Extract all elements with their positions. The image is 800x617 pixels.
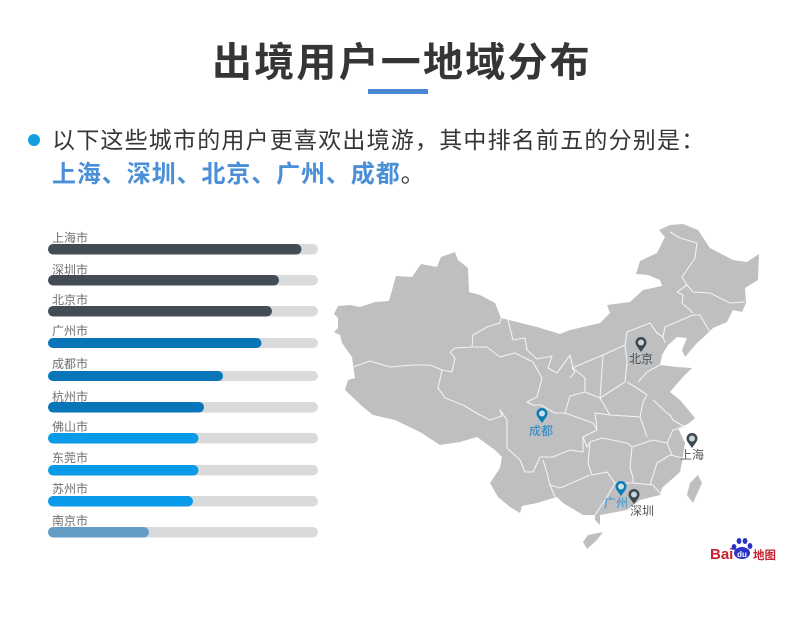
bar: 苏州市: 苏州市	[52, 481, 88, 496]
bar: 广州市	[48, 323, 318, 348]
mainland	[334, 224, 759, 525]
Baidu map logo: 地图	[753, 548, 776, 562]
bullet dot	[28, 134, 40, 146]
bar: 广州市: 广州市	[52, 323, 88, 338]
marker: 成都: 成都	[529, 424, 553, 438]
marker: 上海: 上海	[680, 447, 704, 462]
bar: 杭州市	[48, 389, 318, 412]
bar: 北京市	[48, 292, 318, 316]
Taiwan	[687, 475, 702, 503]
bar: 南京市: 南京市	[52, 513, 88, 528]
bar: 成都市: 成都市	[52, 356, 88, 371]
bullet text block	[28, 127, 705, 188]
marker: 上海	[680, 433, 704, 462]
marker: 广州	[604, 481, 628, 510]
bar: 深圳市	[48, 262, 318, 286]
bar: 上海市	[48, 230, 318, 254]
marker: 深圳	[628, 489, 654, 518]
bar: 杭州市: 杭州市	[52, 389, 88, 404]
bar: 佛山市	[48, 419, 318, 444]
bar: 深圳市: 深圳市	[52, 262, 88, 277]
marker: 深圳: 深圳	[630, 504, 654, 518]
province borders	[353, 232, 745, 515]
marker: 成都	[529, 408, 553, 438]
map of China	[334, 224, 759, 549]
bar chart: cities	[48, 230, 318, 538]
marker: 北京	[629, 337, 653, 366]
bar: 北京市: 北京市	[52, 292, 88, 307]
Baidu map logo: du	[737, 550, 747, 559]
bar: 成都市	[48, 356, 318, 381]
title underline	[368, 89, 428, 94]
bar: 佛山市: 佛山市	[52, 419, 88, 434]
bar: 南京市	[48, 513, 318, 538]
intro sentence: 以下这些城市的用户更喜欢出境游，其中排名前五的分别是：	[52, 127, 705, 153]
bar: 苏州市	[48, 481, 318, 506]
bar: 上海市: 上海市	[52, 230, 88, 245]
Baidu map logo: Bai	[710, 546, 733, 563]
bar: 东莞市: 东莞市	[52, 450, 88, 465]
marker: 北京: 北京	[629, 352, 653, 366]
Baidu map logo	[710, 538, 776, 563]
title: 出境用户一地域分布	[212, 41, 592, 85]
Hainan	[583, 532, 603, 549]
top five cities: 上海、深圳、北京、广州、成都。	[52, 161, 426, 188]
marker: 广州: 广州	[604, 496, 628, 510]
bar: 东莞市	[48, 450, 318, 476]
